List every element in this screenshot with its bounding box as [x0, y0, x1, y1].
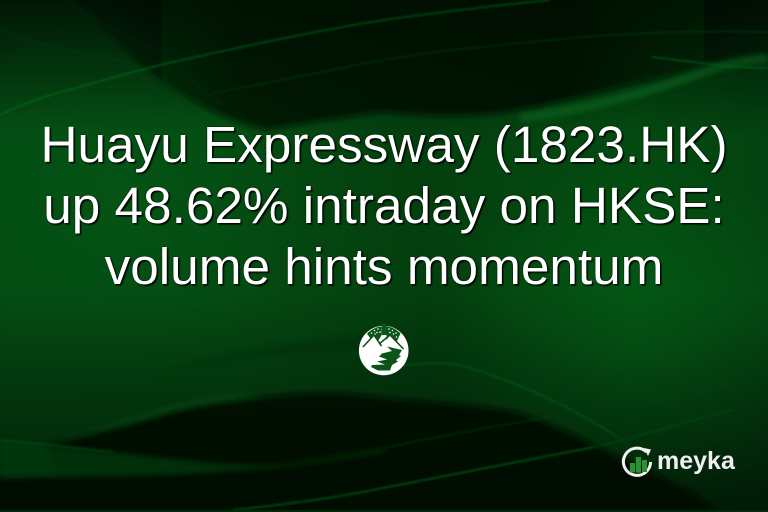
wordmark: meyka: meyka	[657, 447, 735, 475]
title: up 48.62% intraday on HKSE:	[43, 177, 725, 234]
icon: mountain and river emblem	[358, 324, 408, 376]
title	[40, 116, 728, 295]
title: Huayu Expressway (1823.HK)	[40, 116, 728, 173]
title: volume hints momentum	[105, 238, 663, 295]
icon: meyka ring with bars	[622, 446, 652, 477]
logo: meyka	[622, 446, 736, 477]
